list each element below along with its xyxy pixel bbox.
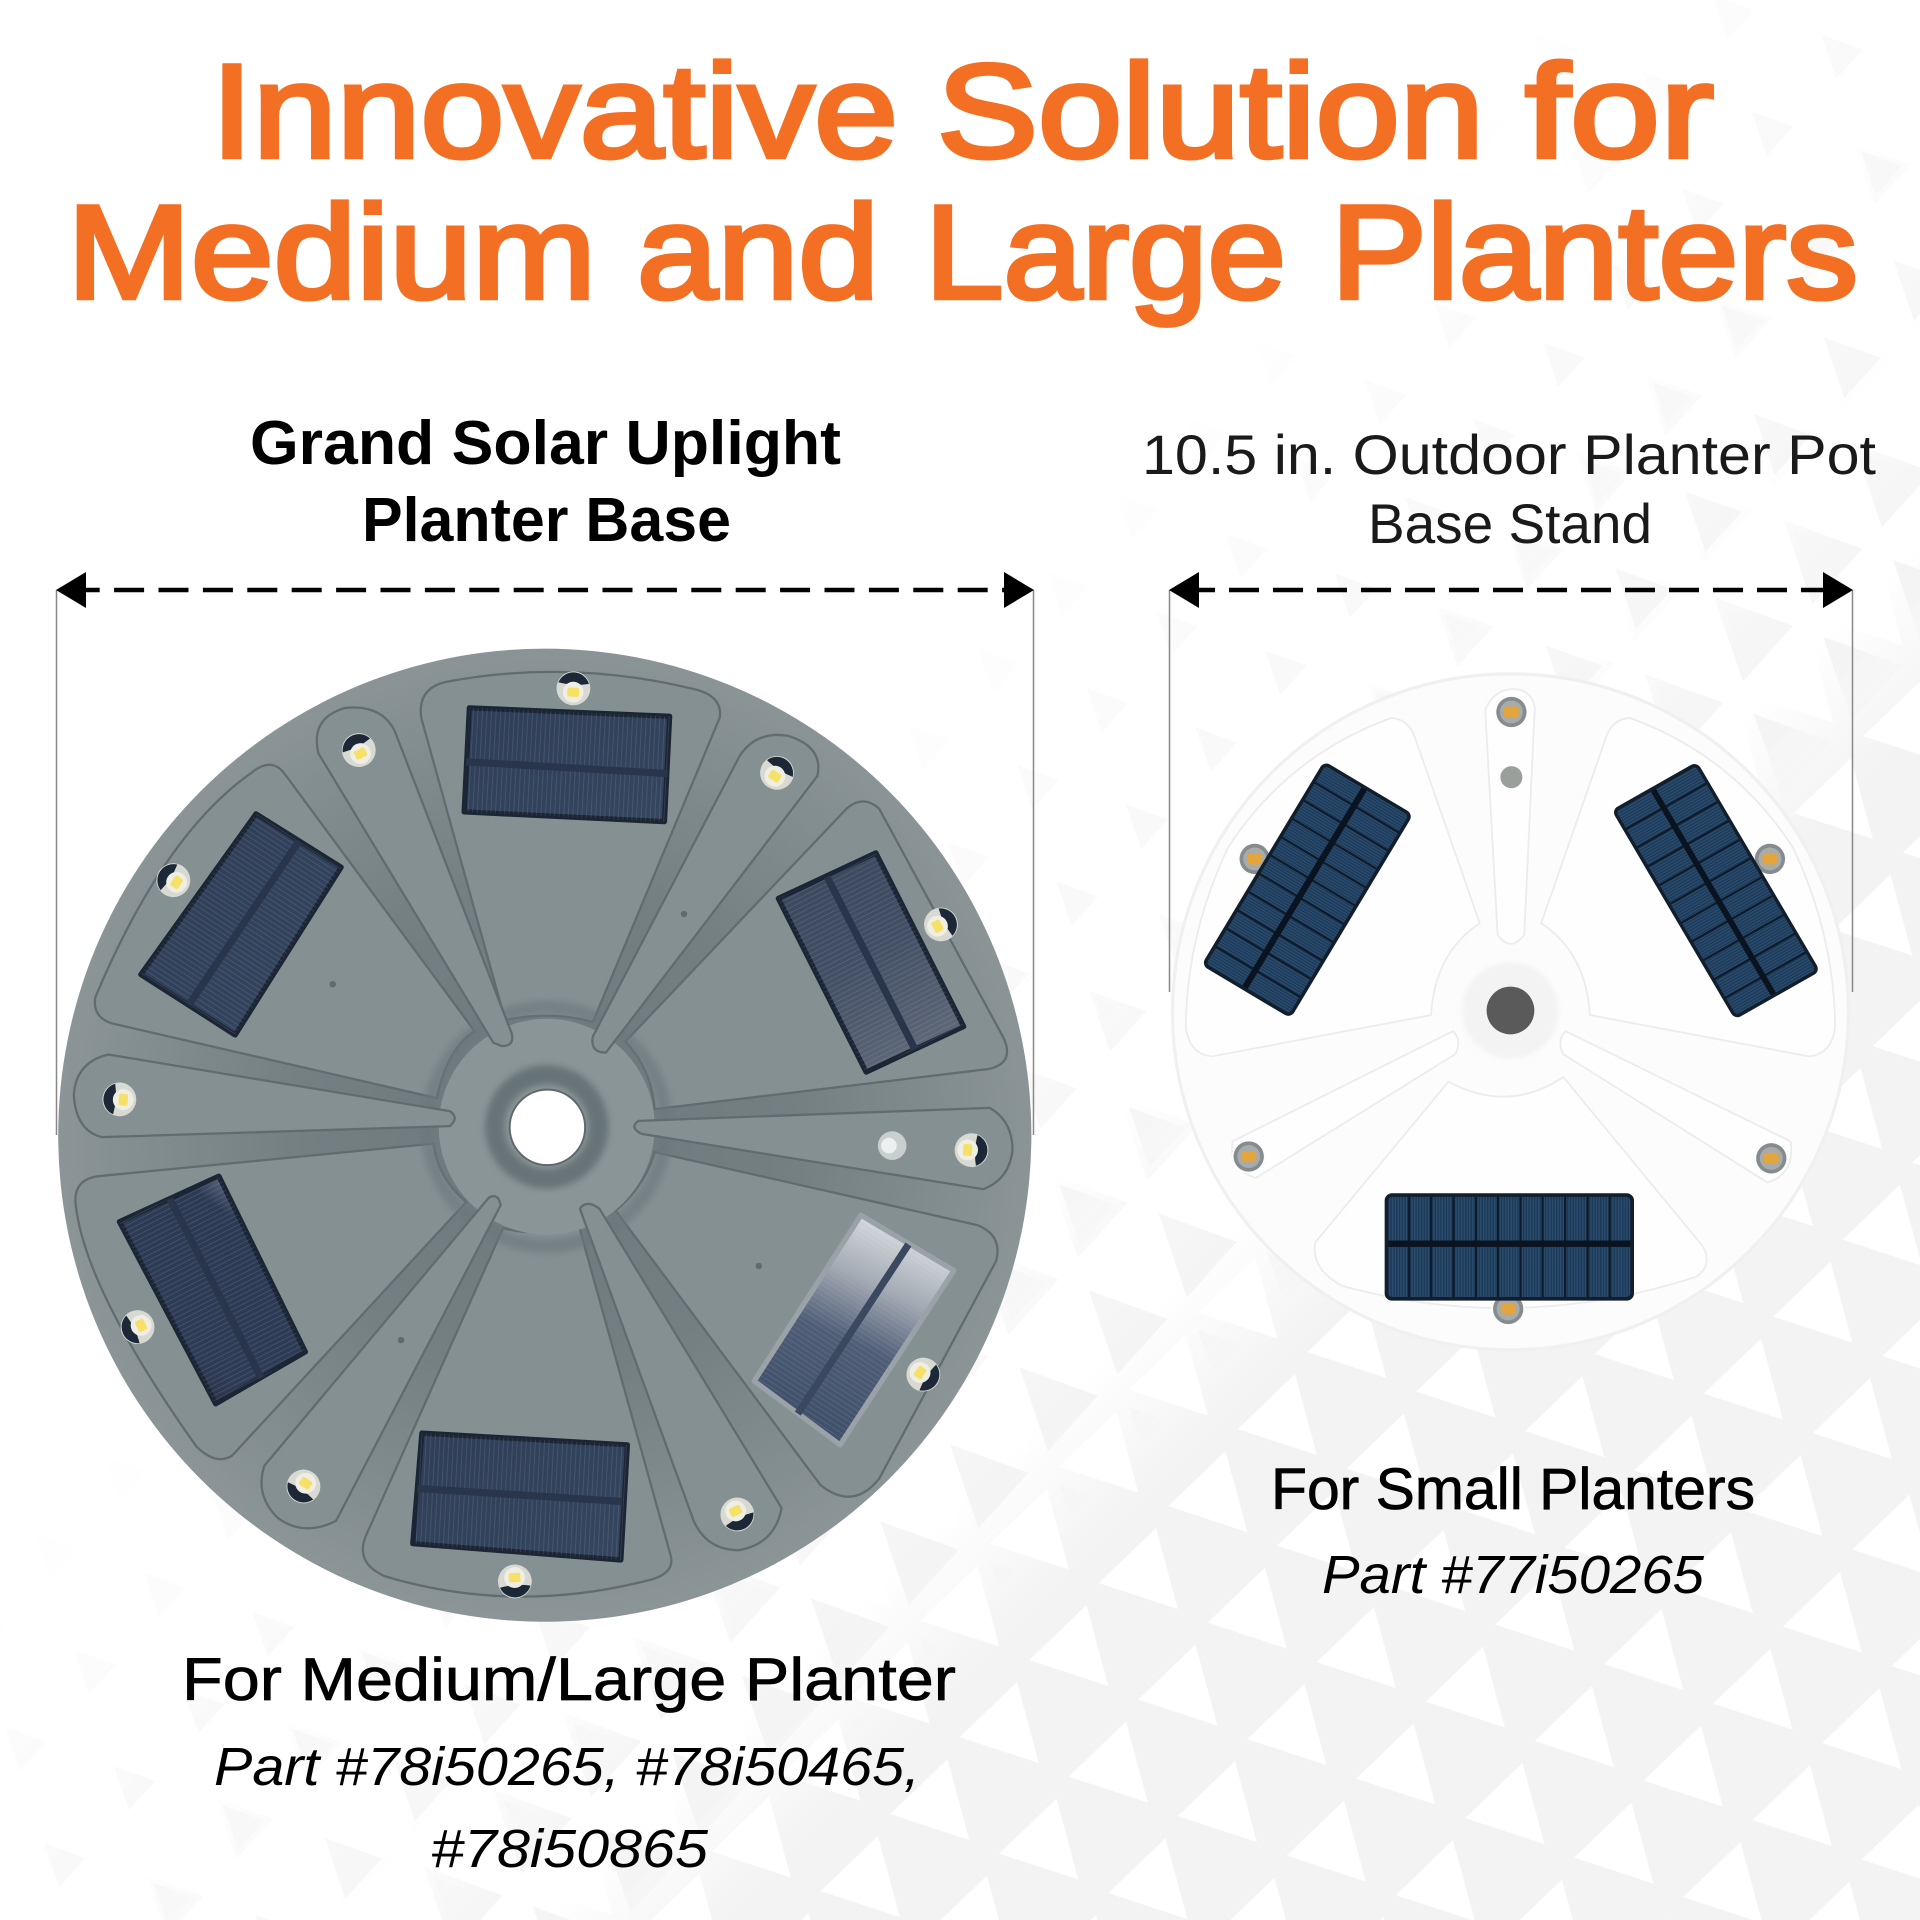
caption: medium and large planter: For Medium/Large Planter bbox=[182, 1646, 956, 1713]
background triangle pattern bbox=[344, 358, 1920, 1920]
solar panel wedges bbox=[75, 672, 1007, 1597]
panel bus bars bbox=[170, 762, 915, 1501]
title: Medium bbox=[67, 179, 596, 327]
caption: small planters: Part #77i50265 bbox=[1322, 1545, 1705, 1605]
light sensor and small dots bbox=[329, 911, 906, 1343]
title: and bbox=[637, 179, 879, 327]
heading: Grand Solar Uplight Planter Base: Grand Solar Uplight bbox=[250, 409, 841, 478]
heading: Grand Solar Uplight Planter Base: Planter Base bbox=[362, 486, 731, 555]
title: Large bbox=[925, 179, 1286, 327]
title: Innovative bbox=[211, 38, 898, 186]
caption: medium and large planter: #78i50865 bbox=[431, 1819, 709, 1879]
small white solar planter stand bbox=[1173, 674, 1848, 1350]
title: Planters bbox=[1331, 179, 1858, 327]
title: for bbox=[1525, 38, 1714, 186]
large gray solar planter base bbox=[58, 649, 1031, 1622]
LED lights bbox=[101, 671, 989, 1599]
raised wedge outlines bbox=[1186, 689, 1835, 1308]
caption: small planters bbox=[1271, 1457, 1755, 1605]
caption: small planters: For Small Planters bbox=[1271, 1457, 1755, 1522]
caption: medium and large planter: Part #78i50265, #78i50465, bbox=[214, 1737, 920, 1797]
panel cell texture bbox=[119, 708, 964, 1560]
dimension arrow: small base width bbox=[1169, 572, 1853, 992]
light sensor bbox=[1500, 766, 1522, 788]
title: Solution bbox=[937, 38, 1484, 186]
caption: medium and large planter bbox=[182, 1646, 956, 1879]
LED lights bbox=[1232, 695, 1788, 1326]
soft groove around hub bbox=[428, 1008, 666, 1246]
title bbox=[67, 38, 1858, 327]
solar panels bbox=[1204, 763, 1818, 1299]
dimension arrow: large base width bbox=[56, 572, 1034, 1135]
solar panels bbox=[119, 708, 964, 1560]
heading: Grand Solar Uplight Planter Base bbox=[250, 409, 841, 555]
heading: 10.5 in. Outdoor Planter Pot Base Stand: 10.5 in. Outdoor Planter Pot bbox=[1142, 423, 1876, 486]
heading: 10.5 in. Outdoor Planter Pot Base Stand: Base Stand bbox=[1368, 492, 1652, 555]
heading: 10.5 in. Outdoor Planter Pot Base Stand bbox=[1142, 423, 1876, 555]
central hub and hole bbox=[1462, 962, 1559, 1059]
LED arm wedges bbox=[74, 707, 1012, 1550]
central hub and mounting hole bbox=[439, 1019, 655, 1235]
